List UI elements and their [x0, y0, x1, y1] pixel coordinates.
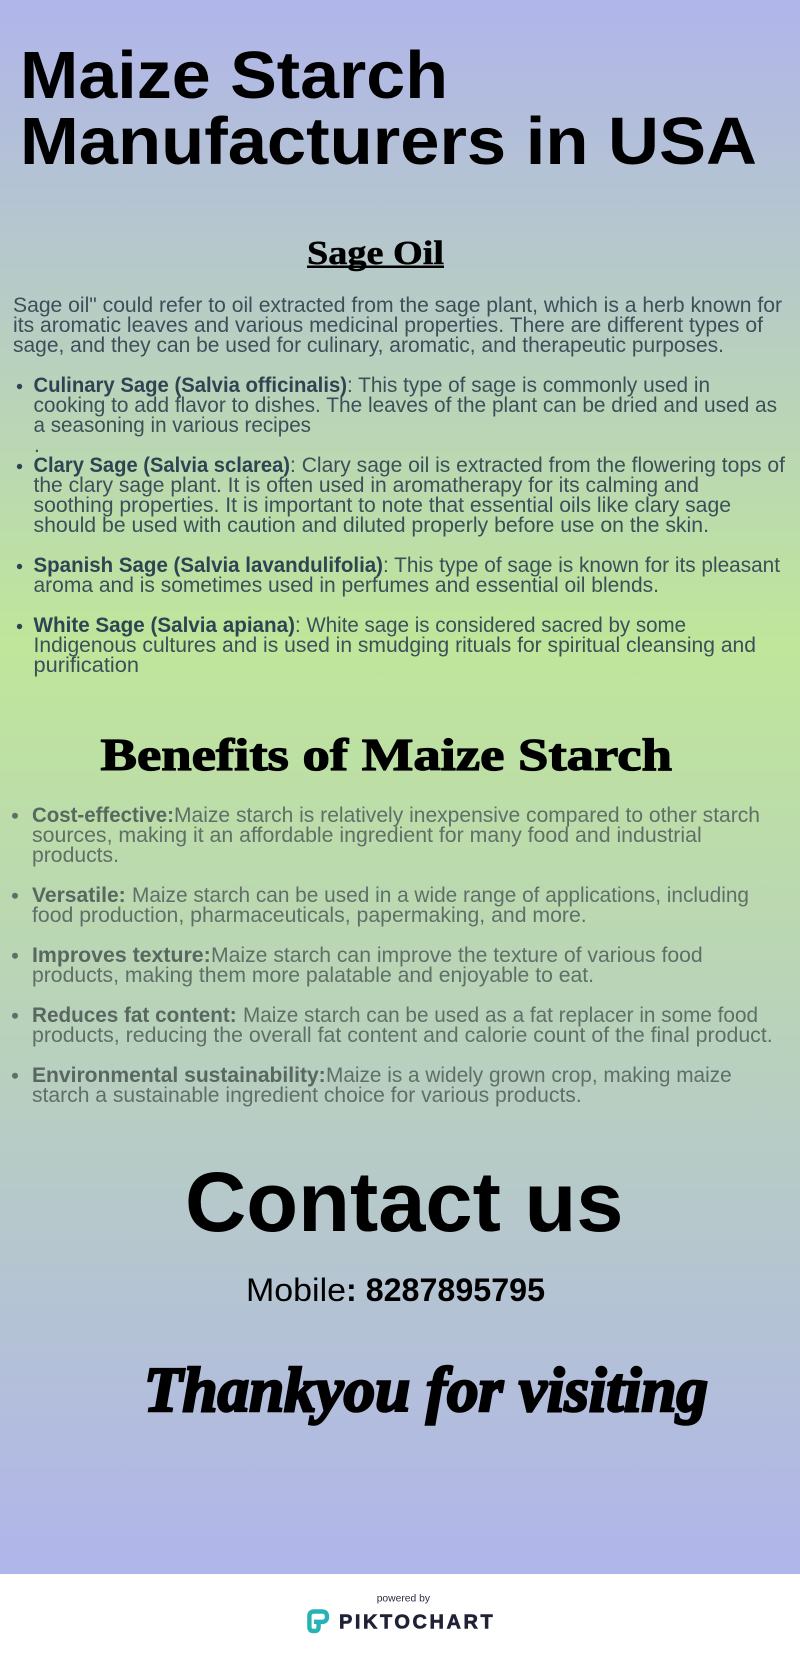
icon: Piktochart logo [309, 1612, 327, 1631]
item: Versatile: food production, pharmaceuticals, papermaking, and more. [32, 904, 587, 927]
item: Versatile: Versatile: [32, 884, 126, 907]
item: Environmental sustainability [12, 1064, 732, 1107]
item: White Sage: purification [34, 654, 139, 677]
item: Cost-effective [12, 804, 760, 867]
item: Culinary Sage: cooking to add flavor to dishes. The leaves of the plant can be dried and used as [34, 394, 777, 417]
list: benefits [12, 804, 773, 1107]
item: Culinary Sage [17, 374, 777, 457]
item: Environmental sustainability: Environmental sustainability: [32, 1064, 326, 1087]
intro paragraph: sage, and they can be used for culinary, aromatic, and therapeutic purposes. [13, 334, 724, 357]
footer panel [0, 1574, 800, 1654]
item: Versatile: Maize starch can be used in a wide range of applications, including [132, 884, 749, 907]
mobile number [246, 1272, 545, 1308]
item: Culinary Sage: a seasoning in various recipes [34, 414, 311, 437]
item: Clary Sage: Clary Sage (Salvia sclarea) [34, 454, 290, 477]
item: White Sage: Indigenous cultures and is used in smudging rituals for spiritual cleansing and [34, 634, 756, 657]
list: types of sage [17, 374, 785, 677]
mobile number: Mobile [246, 1272, 346, 1308]
item: Environmental sustainability: starch a sustainable ingredient choice for various products. [32, 1084, 582, 1107]
item: Cost-effective: products. [32, 844, 119, 867]
item: Clary Sage: the clary sage plant. It is often used in aromatherapy for its calming and [34, 474, 699, 497]
item: Spanish Sage [17, 554, 780, 597]
item: Culinary Sage: . [34, 434, 40, 457]
item: Clary Sage: should be used with caution and diluted properly before use on the skin. [34, 514, 709, 537]
item: Spanish Sage: aroma and is sometimes used in perfumes and essential oil blends. [34, 574, 659, 597]
heading: Contact us: Contact us [185, 1155, 624, 1249]
intro paragraph: Sage oil" could refer to oil extracted from the sage plant, which is a herb known for [13, 294, 782, 317]
item: Reduces fat content: products, reducing the overall fat content and calorie count of the final product. [32, 1024, 773, 1047]
item: Reduces fat content: Reduces fat content: [32, 1004, 237, 1027]
item: Cost-effective: Cost-effective: [32, 804, 174, 827]
item: White Sage: : White sage is considered sacred by some [295, 614, 686, 637]
item: Improves texture: Improves texture: [32, 944, 211, 967]
heading: Benefits of Maize Starch: Benefits of Maize Starch [100, 729, 672, 780]
intro paragraph [13, 294, 782, 357]
item: Cost-effective: Maize starch is relatively inexpensive compared to other starch [174, 804, 760, 827]
powered by label: powered by [377, 1592, 431, 1604]
mobile number: : 8287895795 [346, 1272, 545, 1308]
title [20, 38, 757, 179]
item: Improves texture [12, 944, 703, 987]
item: Clary Sage: soothing properties. It is important to note that essential oils like clary sage [34, 494, 731, 517]
item: Culinary Sage: : This type of sage is commonly used in [347, 374, 710, 397]
intro paragraph: its aromatic leaves and various medicinal properties. There are different types of [13, 314, 763, 337]
item: Clary Sage [17, 454, 785, 537]
item: Spanish Sage: Spanish Sage (Salvia lavandulifolia) [34, 554, 383, 577]
title: Maize Starch [20, 38, 448, 113]
heading: Sage Oil: Sage Oil [307, 235, 444, 272]
item: Reduces fat content: Maize starch can be used as a fat replacer in some food [243, 1004, 758, 1027]
item: Spanish Sage: : This type of sage is known for its pleasant [383, 554, 780, 577]
item: White Sage: White Sage (Salvia apiana) [34, 614, 295, 637]
title: Manufacturers in USA [20, 104, 757, 179]
item: Versatile [12, 884, 749, 927]
item: Culinary Sage: Culinary Sage (Salvia officinalis) [34, 374, 347, 397]
item: Clary Sage: : Clary sage oil is extracted from the flowering tops of [290, 454, 785, 477]
item: Improves texture: Maize starch can improve the texture of various food [211, 944, 703, 967]
item: Reduces fat content [12, 1004, 773, 1047]
Piktochart wordmark: PIKTOCHART [339, 1612, 493, 1634]
item: Improves texture: products, making them more palatable and enjoyable to eat. [32, 964, 594, 987]
closing message: Thankyou for visiting: Thankyou for visiting [144, 1354, 708, 1425]
item: Cost-effective: sources, making it an affordable ingredient for many food and industrial [32, 824, 702, 847]
item: Environmental sustainability: Maize is a widely grown crop, making maize [326, 1064, 732, 1087]
item: White Sage [17, 614, 756, 677]
